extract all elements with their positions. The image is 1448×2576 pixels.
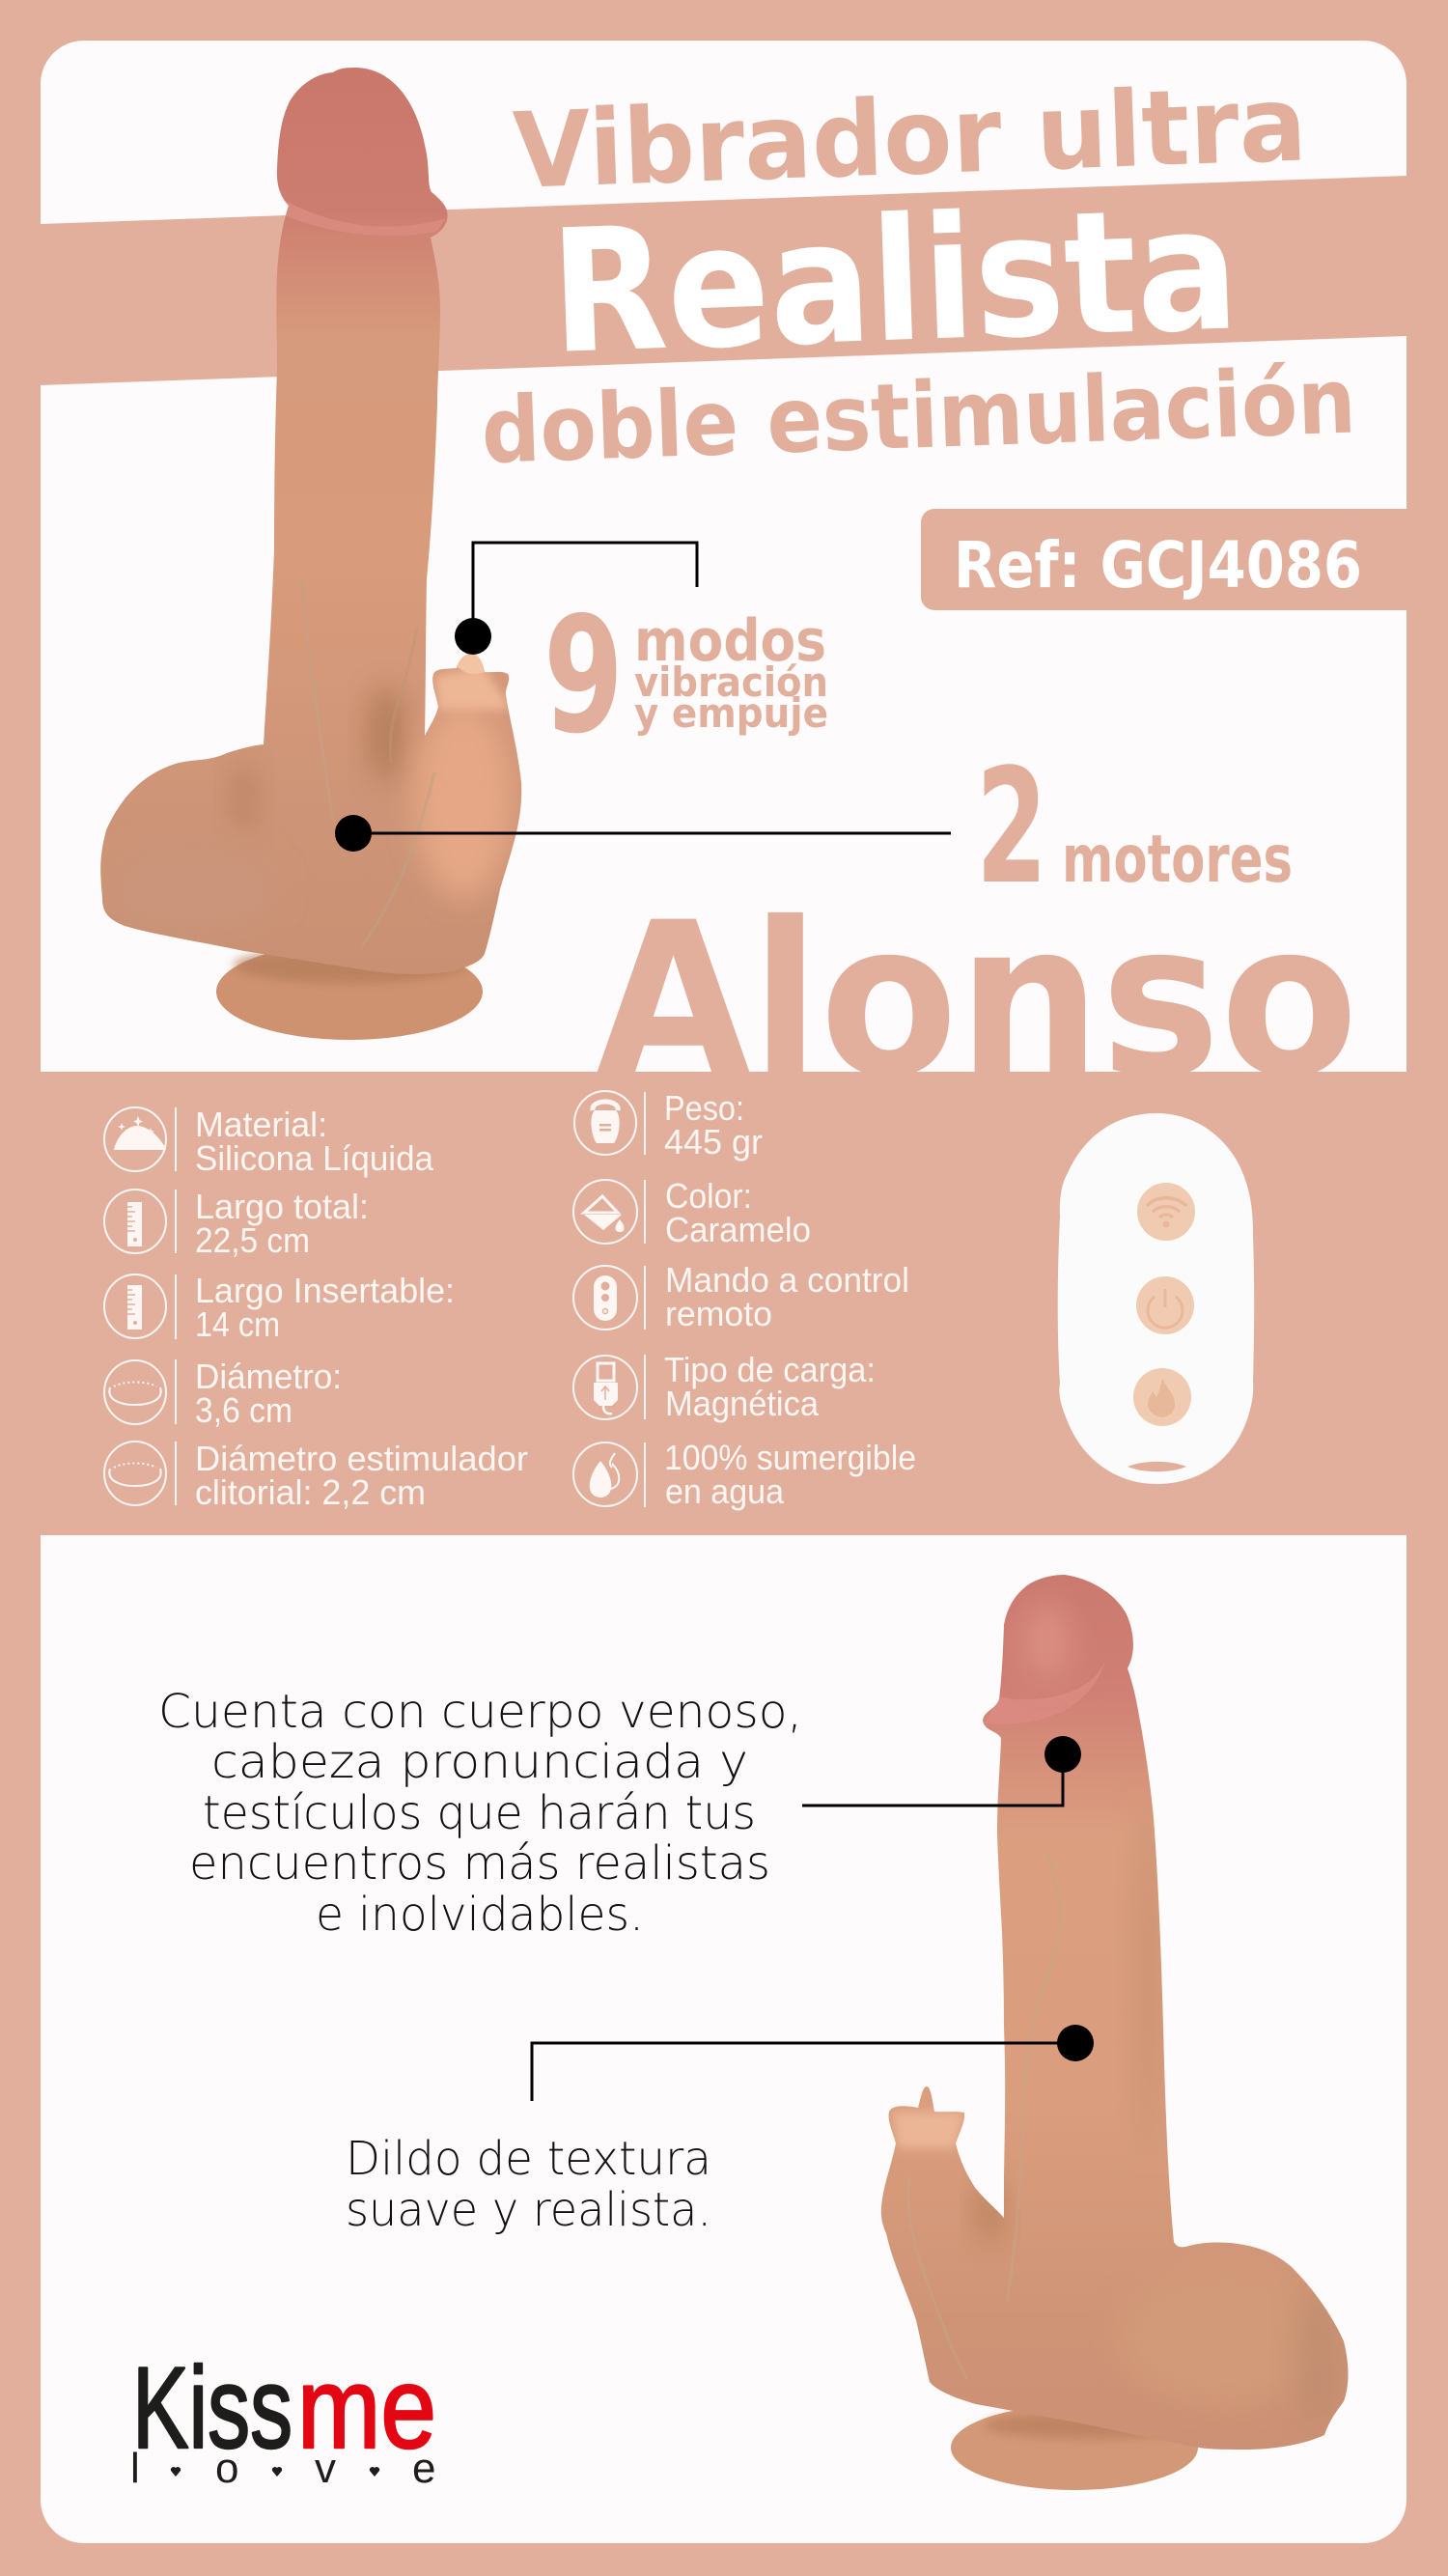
- callout line: cuerpo venoso: [802, 1754, 1063, 1806]
- spec: Color: Caramelo: [665, 1210, 811, 1249]
- callout line: motores: [353, 832, 951, 834]
- spec: 100% sumergible: en agua: [665, 1471, 785, 1511]
- product name: Alonso: Alonso: [596, 877, 1358, 1124]
- spec: Diámetro estimulador: Diámetro estimulador: [195, 1439, 528, 1478]
- spec: Diámetro: [104, 1357, 342, 1430]
- product photo: bottom: [869, 1564, 1361, 2490]
- description: cuerpo venoso: encuentros más realistas: [189, 1836, 770, 1890]
- title: Realista: Realista: [547, 170, 1241, 392]
- description: cuerpo venoso: e inolvidables.: [316, 1888, 644, 1942]
- logo: KissMe love: me: [297, 2343, 436, 2473]
- description: cuerpo venoso: testículos que harán tus: [203, 1786, 756, 1840]
- spec: Color: [573, 1176, 811, 1249]
- callout line: modos: [473, 543, 697, 636]
- spec: Color: Color:: [665, 1176, 752, 1216]
- slanted title band: [41, 176, 1406, 385]
- panel: top white card: [41, 41, 1406, 1072]
- panel: bottom white card: [41, 1535, 1406, 2543]
- spec: Diámetro estimulador: clitorial: 2,2 cm: [195, 1472, 426, 1512]
- callout line: textura: [532, 2043, 1075, 2101]
- spec: Largo total: 22,5 cm: [195, 1220, 310, 1260]
- logo: KissMe love: l: [130, 2445, 140, 2492]
- spec: Mando a control remoto: remoto: [665, 1294, 772, 1333]
- spec: Largo Insertable: [104, 1271, 455, 1344]
- remote button: flame: [1133, 1368, 1191, 1426]
- spec: Peso: [574, 1088, 763, 1162]
- spec: Diámetro: 3,6 cm: [195, 1390, 292, 1430]
- callout dot: motores: [335, 815, 372, 852]
- reference tag: Ref: GCJ4086: [954, 528, 1362, 602]
- spec: 100% sumergible: 100% sumergible: [664, 1438, 916, 1477]
- spec: Material: [104, 1105, 434, 1178]
- description: textura: [346, 2132, 711, 2237]
- spec: Mando a control remoto: [573, 1260, 909, 1333]
- feature: 2 motores: [976, 735, 1293, 919]
- feature: 9 modos: y empuje: [634, 689, 828, 737]
- logo: KissMe love: Kiss: [132, 2343, 292, 2473]
- description: cuerpo venoso: [158, 1685, 802, 1942]
- title: Vibrador ultra: Vibrador ultra: [512, 64, 1308, 212]
- callout dot: modos: [455, 618, 491, 655]
- spec: Largo total: Largo total:: [195, 1187, 369, 1226]
- feature: 2 motores: 2: [976, 735, 1047, 919]
- callout dot: cuerpo venoso: [1044, 1736, 1081, 1773]
- description: cuerpo venoso: cabeza pronunciada y: [211, 1735, 748, 1789]
- description: textura: Dildo de textura: [346, 2132, 711, 2186]
- reference tag: [921, 509, 1406, 610]
- spec: 100% sumergible: [573, 1438, 916, 1511]
- spec: Largo Insertable: Largo Insertable:: [195, 1271, 455, 1310]
- spec list: left column: [104, 1105, 528, 1512]
- spec: Material: Silicona Líquida: [195, 1138, 434, 1178]
- spec: Diámetro: Diámetro:: [195, 1357, 342, 1396]
- remote control: [1058, 1113, 1254, 1484]
- spec: Diámetro estimulador: [104, 1439, 528, 1512]
- feature: 9 modos: modos: [634, 607, 826, 675]
- spec: Material: Material:: [195, 1105, 327, 1144]
- spec: Largo total: [104, 1187, 369, 1260]
- logo: KissMe love: o: [215, 2445, 238, 2492]
- logo: KissMe love: e: [412, 2445, 435, 2492]
- spec: Largo Insertable: 14 cm: [195, 1304, 280, 1344]
- spec: Peso: Peso:: [664, 1088, 744, 1128]
- callout dot: textura: [1057, 2025, 1094, 2061]
- remote button: wifi: [1137, 1183, 1195, 1241]
- feature: 2 motores: motores: [1062, 822, 1293, 898]
- spec: Tipo de carga: Magnética: [665, 1384, 820, 1423]
- spec: Mando a control remoto: Mando a control: [665, 1260, 909, 1300]
- feature: 9 modos: 9: [543, 583, 624, 770]
- feature: 9 modos: [543, 583, 828, 770]
- spec: Peso: 445 gr: [664, 1122, 763, 1162]
- logo: KissMe love: [130, 2343, 436, 2492]
- feature: 9 modos: vibración: [634, 658, 828, 706]
- band covering bottom of product name: [0, 1072, 1448, 1535]
- subtitle: doble estimulación: doble estimulación: [480, 349, 1357, 485]
- spec list: right column: [573, 1088, 916, 1511]
- description: textura: suave y realista.: [346, 2183, 711, 2237]
- logo: KissMe love: v: [315, 2445, 336, 2492]
- spec: Tipo de carga: Tipo de carga:: [664, 1350, 876, 1389]
- product photo: top: [97, 58, 531, 1040]
- remote button: power: [1136, 1276, 1194, 1334]
- description: cuerpo venoso: Cuenta con cuerpo venoso,: [158, 1685, 802, 1739]
- spec: Tipo de carga: [573, 1350, 876, 1423]
